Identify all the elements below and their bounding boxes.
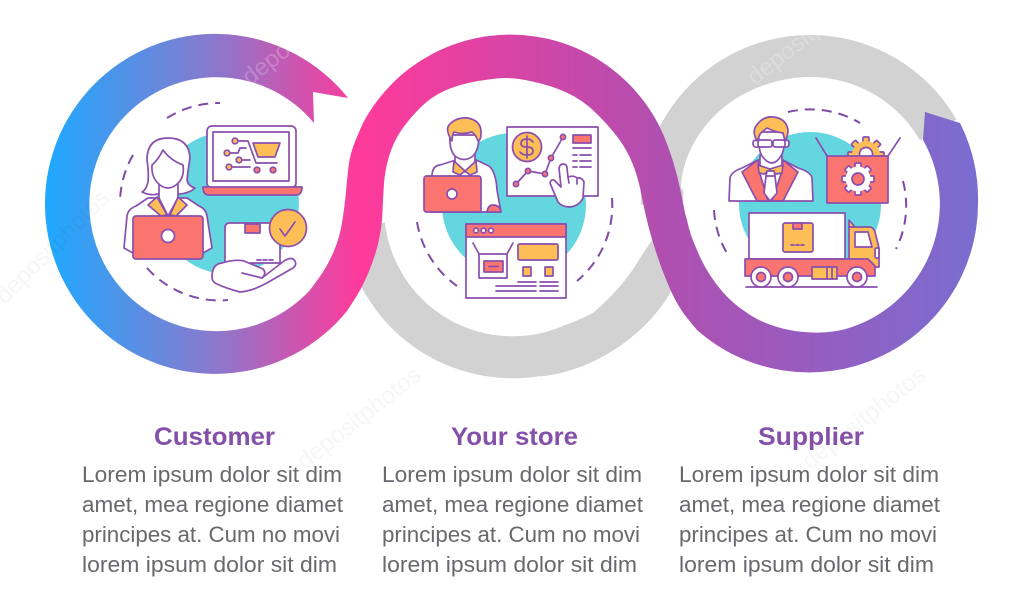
body: your store	[382, 462, 643, 577]
body: supplier: principes at. Cum no movi	[679, 522, 937, 547]
delivery truck	[745, 213, 879, 287]
analytics panel with dollar coin and pointer	[507, 127, 598, 207]
body: your store: principes at. Cum no movi	[382, 522, 640, 547]
heading: supplier: Supplier	[758, 423, 864, 451]
front gear	[842, 163, 874, 195]
open box with gears	[816, 137, 900, 203]
back gear	[848, 137, 884, 173]
icon: your store	[417, 118, 612, 298]
body: supplier: Lorem ipsum dolor sit dim	[679, 462, 939, 487]
body: supplier	[679, 462, 940, 577]
body: your store: Lorem ipsum dolor sit dim	[382, 462, 642, 487]
text column: your store	[382, 423, 643, 577]
body: customer: Lorem ipsum dolor sit dim	[82, 462, 342, 487]
body: supplier: amet, mea regione diamet	[679, 492, 940, 517]
heading: your store: Your store	[451, 423, 578, 451]
heading: customer: Customer	[154, 423, 275, 451]
body: your store: lorem ipsum dolor sit dim	[382, 552, 637, 577]
body: customer: lorem ipsum dolor sit dim	[82, 552, 337, 577]
text column: supplier	[679, 423, 940, 577]
watermark: depositphotos	[292, 361, 426, 475]
laptop with shopping cart	[203, 126, 302, 195]
text column: customer	[82, 423, 343, 577]
watermark: depositphotos	[797, 361, 931, 475]
body: your store: amet, mea regione diamet	[382, 492, 643, 517]
body: supplier: lorem ipsum dolor sit dim	[679, 552, 934, 577]
body: customer: amet, mea regione diamet	[82, 492, 343, 517]
parcel on open hand	[212, 210, 306, 292]
gradient ribbon: customer, store and supplier arcs with arrow head	[45, 34, 978, 374]
watermark	[0, 0, 931, 475]
grey ribbon: middle circle bottom and supplier circle top	[364, 56, 938, 376]
body: customer	[82, 462, 343, 577]
store web page window	[466, 224, 566, 298]
body: customer: principes at. Cum no movi	[82, 522, 340, 547]
man with laptop	[424, 118, 501, 212]
businessman with glasses	[729, 117, 813, 201]
icon: supplier	[714, 109, 906, 287]
woman with laptop	[124, 138, 212, 259]
icon: customer	[120, 103, 306, 300]
